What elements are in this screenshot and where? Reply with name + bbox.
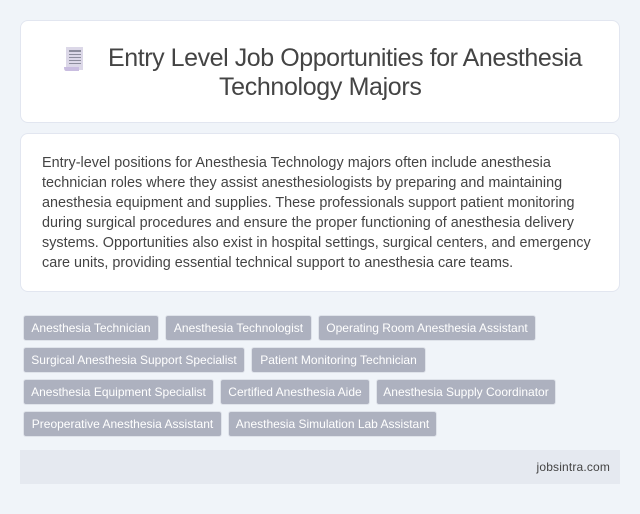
description text: anesthesia equipment and supplies. These professionals support patient monitoring — [42, 195, 575, 211]
tag: Operating Room Anesthesia Assistant — [326, 321, 528, 335]
footer bar — [20, 450, 620, 484]
footer source text: jobsintra.com — [537, 460, 610, 474]
panel: title card — [20, 20, 620, 123]
icon: document scroll — [64, 47, 83, 71]
tag: Surgical Anesthesia Support Specialist — [31, 353, 237, 367]
title — [108, 44, 582, 101]
tag — [23, 379, 214, 405]
description text: Entry-level positions for Anesthesia Technology majors often include anesthesia — [42, 155, 551, 171]
tag — [318, 315, 536, 341]
description text: systems. Opportunities also exist in hospital settings, surgical centers, and emergency — [42, 235, 591, 251]
tag — [251, 347, 426, 373]
description text: technician roles where they assist anesthesiologists by preparing and maintaining — [42, 175, 562, 191]
tag — [228, 411, 437, 437]
tag: Anesthesia Equipment Specialist — [31, 385, 206, 399]
tag: Certified Anesthesia Aide — [228, 385, 362, 399]
tag — [220, 379, 370, 405]
tag: Anesthesia Supply Coordinator — [383, 385, 549, 399]
description text — [42, 155, 591, 271]
tag — [23, 315, 159, 341]
tag: Patient Monitoring Technician — [260, 353, 417, 367]
tag — [376, 379, 556, 405]
tag list — [23, 315, 556, 437]
title: Technology Majors — [219, 73, 422, 101]
tag: Anesthesia Technologist — [174, 321, 303, 335]
tag — [23, 347, 245, 373]
description text: during surgical procedures and ensure the proper functioning of anesthesia delivery — [42, 215, 574, 231]
title: Entry Level Job Opportunities for Anesthesia — [108, 44, 582, 72]
tag — [23, 411, 222, 437]
tag: Anesthesia Simulation Lab Assistant — [236, 417, 429, 431]
description text: care units, providing essential technical support to anesthesia care teams. — [42, 255, 513, 271]
panel: description — [20, 133, 620, 292]
tag: Preoperative Anesthesia Assistant — [32, 417, 213, 431]
tag — [165, 315, 312, 341]
tag: Anesthesia Technician — [31, 321, 151, 335]
